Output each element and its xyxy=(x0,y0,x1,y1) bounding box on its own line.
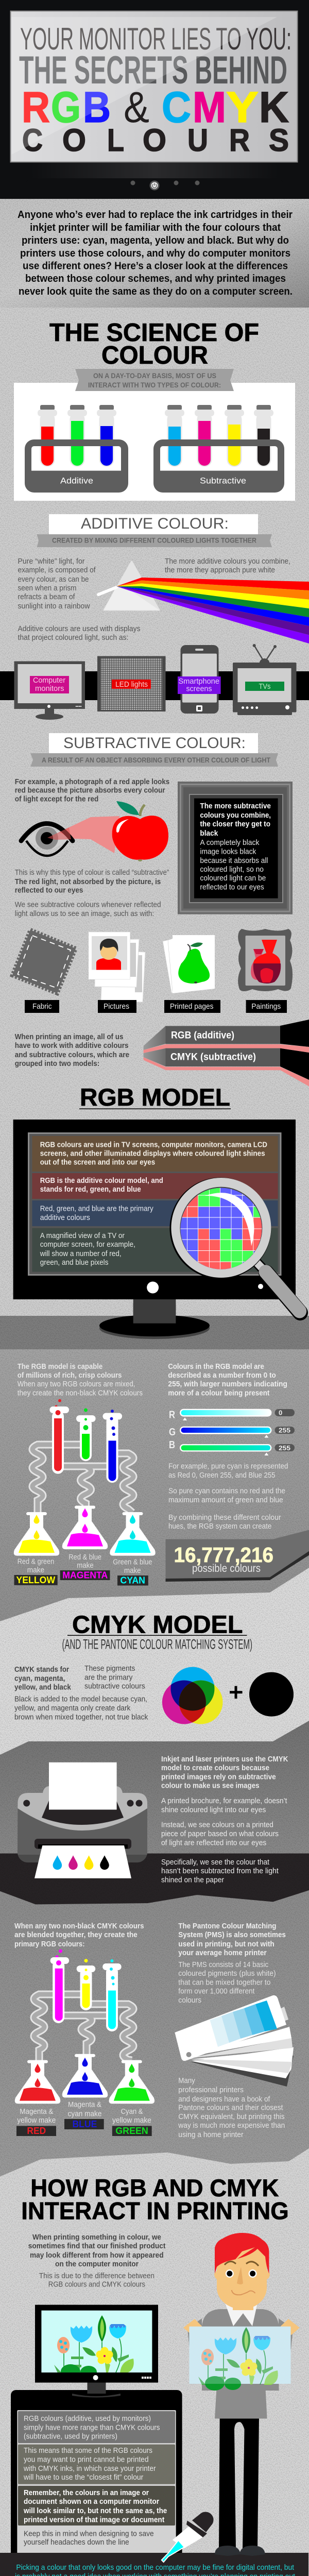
RGB sliders: 0 xyxy=(279,1409,282,1417)
text: Pantone: your average home printer xyxy=(178,1949,267,1957)
printed poster xyxy=(189,2327,290,2391)
flask labels: RED xyxy=(27,2126,46,2136)
intro text: Anyone who’s ever had to replace the ink cartridges in their xyxy=(18,209,293,221)
text: RGB capable: The RGB model is capable xyxy=(18,1363,102,1371)
text: printing in colour: When printing something in colour, we xyxy=(32,2233,161,2242)
text: pure cyan example: as Red 0, Green 255, and Blue 255 xyxy=(168,1471,275,1480)
magnifying glass xyxy=(170,1178,300,1313)
text: why subtractive: light allows us to see an image, such as with: xyxy=(15,910,154,918)
heading: how RGB and CMYK interact: HOW RGB AND CMYK xyxy=(30,2174,279,2201)
text: RGB capable: When any two RGB colours are mixed, xyxy=(18,1380,135,1388)
title: R xyxy=(22,83,50,131)
text: CMYK stands for: are the primary xyxy=(84,1674,133,1682)
title xyxy=(19,22,291,158)
text: RGB numbers: more of a colour being present xyxy=(168,1389,270,1398)
text: pure cyan example: maximum amount of green and blue xyxy=(168,1496,283,1504)
text: CMYK stands for xyxy=(14,1665,148,1722)
monitor text 4: computer screen, for example, xyxy=(40,1241,135,1249)
title: C xyxy=(22,123,43,158)
callout: 16,777,216 possible colours xyxy=(166,1530,309,1582)
text: Pantone: The PMS consists of 14 basic xyxy=(178,1961,268,1969)
tube: green xyxy=(76,1409,96,1461)
pencils: RGB and CMYK: CMYK (subtractive) xyxy=(170,1052,256,1062)
text: RGB capable: of millions of rich, crisp colours xyxy=(18,1371,122,1380)
labels: Paintings xyxy=(251,1003,281,1011)
text: pure cyan example: By combining these different colour xyxy=(168,1514,281,1522)
RGB sliders: 255 xyxy=(279,1426,290,1434)
band: picking a colour: Picking a colour that only looks good on the computer may be fine for digital content, but xyxy=(16,2564,294,2572)
text: pure white light: refracts a beam of xyxy=(18,593,75,601)
illustration: Pantone swatch book xyxy=(175,1995,294,2087)
tube: red xyxy=(49,1399,69,1474)
tablet panel: explanation: simply have more range than CMYK colours xyxy=(24,2424,160,2432)
text: Pantone: used in printing, but not with xyxy=(178,1940,274,1948)
tablet panel: explanation: will look similar to, but not the same as, the xyxy=(23,2507,167,2515)
tube: magenta xyxy=(50,1950,69,2023)
text: Pantone: form over 1,000 different xyxy=(178,1988,254,1996)
text: two models: and subtractive colours, which are xyxy=(15,1051,129,1059)
monitor text 2: RGB is the additive colour model, and xyxy=(40,1177,163,1185)
text: Pantone: System (PMS) is also sometimes xyxy=(178,1931,286,1939)
heading: additive colour: ADDITIVE COLOUR: xyxy=(81,515,229,532)
text: printers use CMYK: printed images rely on subtractive xyxy=(161,1773,276,1782)
text: printing in colour xyxy=(28,2233,166,2289)
text: professional printers: way is much more expensive than xyxy=(178,2122,285,2130)
prism and rainbow xyxy=(98,562,309,643)
intro text: inkjet printer will be familiar with the four colours that xyxy=(30,222,281,233)
picture frame with text: black xyxy=(200,829,218,838)
subtractive test tubes: Subtractive xyxy=(200,476,246,486)
title: S xyxy=(269,123,289,158)
text: red apple example xyxy=(15,778,169,804)
flask labels: make xyxy=(77,1562,94,1570)
heading: subtractive colour xyxy=(30,733,278,767)
text: CMYK stands for: These pigments xyxy=(84,1665,135,1673)
heading: how RGB and CMYK interact: INTERACT IN PRINTING xyxy=(21,2197,289,2225)
tablet panel: explanation: will have to use the “closest fit” colour xyxy=(23,2473,143,2482)
RGB sliders xyxy=(169,1409,295,1455)
monitor text 2 xyxy=(32,1173,278,1199)
title: O xyxy=(143,123,166,158)
title: M xyxy=(193,83,226,131)
CMY venn diagram plus black xyxy=(162,1667,294,1724)
picture frame with text xyxy=(178,782,293,914)
flask labels: GREEN xyxy=(115,2126,148,2136)
heading: additive colour: CREATED BY MIXING DIFFERENT COLOURED LIGHTS TOGETHER xyxy=(52,536,256,545)
text: Pantone: coloured pigments (plus white) xyxy=(178,1970,276,1978)
text: two models xyxy=(15,1033,129,1068)
text: displays: Additive colours are used with displays xyxy=(18,625,140,633)
text: CMYK stands for: Black is added to the model because cyan, xyxy=(14,1695,147,1703)
text: printers use CMYK: model to create colours because xyxy=(161,1764,269,1772)
text: professional printers: professional printers xyxy=(178,2086,244,2094)
icon: TV: TVs xyxy=(259,682,271,691)
text: Pantone: colours xyxy=(178,1996,201,2005)
text: red apple example: of light except for the red xyxy=(15,795,98,804)
text: printers use CMYK: shine coloured light into our eyes xyxy=(161,1806,266,1815)
CMY mixing apparatus xyxy=(15,1950,154,2136)
tablet panel: explanation: document shown on a computer monitor xyxy=(24,2498,159,2506)
ribbon: two types of colour: ON A DAY-TO-DAY BASIS, MOST OF US xyxy=(93,371,216,380)
text: pure cyan example: For example, pure cyan is represented xyxy=(168,1463,288,1471)
picture frame with text: image looks black xyxy=(200,848,256,856)
man holding printed poster xyxy=(183,2233,300,2549)
flask labels: make xyxy=(124,1567,141,1575)
picture frame with text: coloured light, so no xyxy=(200,866,264,874)
heading: additive colour xyxy=(37,514,272,547)
picture frame with text: the closer they get to xyxy=(200,820,270,828)
text: printers use CMYK: colour to make us see images xyxy=(161,1782,260,1790)
illustration: eye and apple xyxy=(21,801,168,861)
icon: computer monitor: Computer xyxy=(33,676,65,685)
text: RGB capable xyxy=(18,1363,143,1398)
text: professional printers xyxy=(178,2077,285,2139)
text: CMYK stands for: yellow, and black xyxy=(14,1684,72,1692)
intro text: between those colour schemes, and why printed images xyxy=(25,273,286,284)
text: pure white light: Pure “white” light, for xyxy=(18,557,85,566)
monitor text 1: RGB colours are used in TV screens, computer monitors, camera LCD xyxy=(40,1141,267,1149)
text: why subtractive: reflected to our eyes xyxy=(15,886,83,894)
title: U xyxy=(187,123,208,158)
icon: smartphone: Smartphone xyxy=(178,677,219,686)
monitor text 4: green, and blue pixels xyxy=(40,1259,108,1267)
tablet panel: explanation: Remember, the colours in an image or xyxy=(24,2489,149,2497)
flask labels: Red & green xyxy=(18,1558,54,1566)
text: pure cyan example: So pure cyan contains no red and the xyxy=(168,1487,285,1496)
heading: CMYK model: CMYK MODEL xyxy=(72,1612,243,1639)
text: CMYK stands for: yellow, and magenta only create dark xyxy=(14,1704,131,1713)
illustration: printer xyxy=(18,1762,147,1878)
labels: Fabric xyxy=(32,1003,52,1011)
text: non-black CMYK: are blended together, they create the xyxy=(14,1931,138,1939)
man's shoes xyxy=(215,2546,265,2556)
title: Y xyxy=(226,83,259,131)
title: R xyxy=(229,123,250,158)
tube: cyan xyxy=(102,1959,122,2031)
text: printers use CMYK: shined on the paper xyxy=(161,1876,224,1885)
subtractive test tubes xyxy=(153,405,284,493)
icon: smartphone xyxy=(178,645,221,714)
labels: Pictures xyxy=(104,1003,129,1011)
RGB sliders: R xyxy=(169,1410,175,1421)
icon: smartphone: screens xyxy=(186,684,212,693)
tube: yellow xyxy=(77,1959,95,2010)
intro text: printers use those colours, and why do computer monitors xyxy=(20,248,290,259)
text: RGB numbers: 255, with larger numbers indicating xyxy=(168,1380,287,1388)
text: more additive colours xyxy=(165,557,290,574)
flask labels: cyan make xyxy=(68,2110,101,2119)
ribbon: two types of colour: INTERACT WITH TWO TYPES OF COLOUR: xyxy=(88,381,221,389)
text: printing in colour: RGB colours and CMYK colours xyxy=(48,2281,145,2289)
band: picking a colour xyxy=(0,2553,308,2576)
RGB mixing apparatus xyxy=(14,1399,156,1586)
text: professional printers: CMYK equivalent, but printing this xyxy=(178,2113,285,2121)
text: RGB numbers: described as a number from 0 to xyxy=(168,1371,276,1380)
heading: the science of colour xyxy=(49,319,259,369)
flask labels: Red & blue xyxy=(68,1553,101,1562)
text: pure white light: sunlight into a rainbow xyxy=(18,602,90,611)
text: Pantone xyxy=(178,1922,286,2005)
text: CMYK stands for: subtractive colours xyxy=(84,1683,145,1691)
ribbon: two types of colour xyxy=(75,369,234,391)
picture frame with text: colours you combine, xyxy=(200,811,271,820)
icon: printed pages xyxy=(163,935,215,993)
text: why subtractive: We see subtractive colours whenever reflected xyxy=(15,901,161,909)
text: pure white light: seen when a prism xyxy=(18,584,76,592)
tablet panel: explanation: yourself headaches down the line xyxy=(24,2538,129,2547)
tablet panel: explanation: you may want to print cannot be printed xyxy=(24,2456,149,2464)
flask labels: yellow make xyxy=(112,2116,151,2125)
picture frame with text: A completely black xyxy=(200,839,260,847)
heading: subtractive colour: A RESULT OF AN OBJECT ABSORBING EVERY OTHER COLOUR OF LIGHT xyxy=(42,756,270,764)
panel: test tubes xyxy=(14,369,295,501)
monitor showing flowers xyxy=(35,2305,158,2398)
subtractive objects xyxy=(12,929,293,1013)
flask: red xyxy=(15,2060,60,2104)
text: professional printers: Pantone colours and their closest xyxy=(178,2104,283,2112)
panel: RGB monitor xyxy=(13,1120,296,1339)
pencils: RGB and CMYK: RGB (additive) xyxy=(171,1030,234,1041)
text: RGB numbers: Colours in the RGB model are xyxy=(168,1363,264,1371)
text: professional printers: and designers have a book of xyxy=(178,2095,270,2104)
text: printers use CMYK: Specifically, we see the colour that xyxy=(161,1858,269,1867)
title: K xyxy=(259,83,289,131)
text: pure white light: every colour, as can be xyxy=(18,575,89,584)
text: RGB numbers xyxy=(168,1363,287,1398)
text: non-black CMYK: primary RGB colours: xyxy=(14,1940,85,1948)
text: two models: grouped into two models: xyxy=(15,1060,99,1068)
tablet panel: explanation xyxy=(11,2390,182,2553)
text: printers use CMYK: Instead, we see colours on a printed xyxy=(161,1821,273,1829)
flask: magenta xyxy=(62,1505,108,1549)
text: two models: have to work with additive colours xyxy=(15,1042,129,1050)
text: red apple example: red because the picture absorbs every colour xyxy=(15,787,165,795)
callout: 16,777,216 possible colours: 16,777,216 xyxy=(174,1543,273,1567)
tablet panel: explanation: RGB colours (additive, used by monitors) xyxy=(24,2415,151,2423)
icon: LED lights: LED lights xyxy=(115,680,148,689)
title: L xyxy=(107,123,124,158)
picture frame with text: The more subtractive xyxy=(200,802,271,810)
text: professional printers: Many xyxy=(178,2077,195,2085)
flask labels xyxy=(16,2101,152,2136)
monitor text 4 xyxy=(32,1228,278,1272)
text: non-black CMYK: When any two non-black CMYK colours xyxy=(14,1922,144,1930)
intro text: printers use: cyan, magenta, yellow and black. But why do xyxy=(22,235,289,246)
flask: cyan xyxy=(110,1512,156,1556)
text: more additive colours: The more additive colours you combine, xyxy=(165,557,290,566)
icon: computer monitor: monitors xyxy=(35,684,64,693)
text: displays xyxy=(18,625,140,642)
icon: computer monitor xyxy=(14,662,85,720)
tablet panel: explanation: printed version of that image or document xyxy=(24,2516,164,2524)
text: printers use CMYK: hasn’t been subtracted from the light xyxy=(161,1867,279,1875)
icon: paintings xyxy=(238,929,293,991)
flask labels: BLUE xyxy=(72,2119,97,2129)
tube: blue xyxy=(103,1410,122,1483)
tablet panel: explanation: Keep this in mind when designing to save xyxy=(24,2530,154,2538)
heading: subtractive colour: SUBTRACTIVE COLOUR: xyxy=(63,735,246,752)
text: why subtractive: This is why this type of colour is called “subtractive” xyxy=(15,869,169,877)
title: O xyxy=(62,123,86,158)
additive displays xyxy=(0,644,309,720)
monitor text 1: out of the screen and into our eyes xyxy=(40,1159,155,1167)
labels: Printed pages xyxy=(170,1003,213,1011)
additive test tubes: Additive xyxy=(60,476,93,486)
flask: green xyxy=(109,2060,154,2104)
heading: the science of colour: THE SCIENCE OF xyxy=(49,319,259,347)
RGB sliders: G xyxy=(169,1427,176,1438)
text: pure cyan example xyxy=(168,1463,288,1531)
intro text: use different ones? Here’s a closer look at the differences xyxy=(23,261,288,272)
flask labels: Magenta & xyxy=(68,2101,101,2109)
icon: fabric xyxy=(12,930,76,993)
tablet panel: explanation: This means that some of the RGB colours xyxy=(24,2447,152,2455)
flask labels: CYAN xyxy=(120,1575,145,1586)
text: two models: When printing an image, all of us xyxy=(15,1033,124,1041)
text: printing in colour: on the computer monitor xyxy=(55,2260,139,2268)
text: printers use CMYK: piece of paper based on what colours xyxy=(161,1830,279,1838)
text: professional printers: using a home printer xyxy=(178,2131,244,2139)
heading: RGB model: RGB MODEL xyxy=(80,1083,230,1111)
heading: the science of colour: COLOUR xyxy=(101,342,208,369)
monitor text 3 xyxy=(32,1200,278,1226)
text: more additive colours: the more they approach pure white xyxy=(165,566,275,574)
flask labels: Cyan & xyxy=(121,2108,143,2116)
title: B xyxy=(83,83,111,131)
heading: CMYK model xyxy=(62,1612,252,1652)
flask labels: YELLOW xyxy=(16,1575,55,1585)
text: printers use CMYK: A printed brochure, for example, doesn’t xyxy=(161,1797,287,1805)
text: printers use CMYK: of light are reflected into our eyes xyxy=(161,1839,266,1847)
intro text: never look quite the same as they do on a computer screen. xyxy=(19,286,293,297)
intro text xyxy=(18,209,293,297)
text: printers use CMYK xyxy=(161,1755,288,1885)
text: printing in colour: sometimes find that our finished product xyxy=(28,2242,166,2250)
flask: blue xyxy=(62,2054,108,2097)
text: pure white light xyxy=(18,557,96,611)
text: printing in colour: may look different from how it appeared xyxy=(30,2251,164,2260)
flask: yellow xyxy=(14,1512,59,1556)
flask labels: Green & blue xyxy=(113,1558,152,1566)
text: printers use CMYK: Inkjet and laser printers use the CMYK xyxy=(161,1755,288,1764)
title: C xyxy=(162,83,191,131)
monitor text 3: additive colours xyxy=(40,1214,90,1222)
additive test tubes xyxy=(25,405,128,493)
text: non-black CMYK xyxy=(14,1922,144,1948)
picture frame with text: because it absorbs all xyxy=(200,857,268,865)
labels xyxy=(25,1000,287,1013)
flask labels xyxy=(14,1553,152,1586)
monitor text 1: screens, and other illuminated displays where coloured light shines xyxy=(40,1150,265,1158)
text: pure white light: example, is composed of xyxy=(18,566,96,574)
monitor text 3: Red, green, and blue are the primary xyxy=(40,1205,153,1213)
flask labels: Magenta & xyxy=(20,2108,54,2116)
icon: TV xyxy=(233,644,297,715)
text: displays: that project coloured light, such as: xyxy=(18,634,129,642)
callout: 16,777,216 possible colours: possible colours xyxy=(192,1563,261,1574)
text: CMYK stands for: cyan, magenta, xyxy=(14,1674,65,1683)
text: RGB capable: they create the non-black CMYK colours xyxy=(18,1389,143,1398)
monitor text 4: will show a number of red, xyxy=(40,1250,122,1258)
monitor text 4: A magnified view of a TV or xyxy=(40,1232,125,1240)
icon: pictures xyxy=(89,932,145,1002)
text: printing in colour: This is due to the difference between xyxy=(39,2272,154,2280)
picture frame with text: reflected to our eyes xyxy=(200,883,264,891)
monitor text 2: stands for red, green, and blue xyxy=(40,1185,141,1194)
flask labels: make xyxy=(27,1566,44,1574)
text: why subtractive xyxy=(15,869,169,918)
heading: how RGB and CMYK interact xyxy=(21,2174,289,2225)
RGB sliders: 255 xyxy=(279,1444,290,1452)
title: G xyxy=(51,83,81,131)
text: CMYK stands for: CMYK stands for xyxy=(14,1666,69,1674)
tablet panel: explanation: with CMYK inks, in which case your printer xyxy=(23,2465,156,2473)
text: pure cyan example: hues, the RGB system can create xyxy=(168,1522,271,1531)
monitor text 1 xyxy=(32,1136,278,1172)
flask labels: yellow make xyxy=(17,2116,56,2125)
text: Pantone: The Pantone Colour Matching xyxy=(178,1922,276,1930)
text: Pantone: that can be mixed together to xyxy=(178,1978,270,1987)
title: & xyxy=(124,83,149,131)
tablet panel: explanation: (subtractive, used by printers) xyxy=(24,2433,117,2441)
text: CMYK stands for: brown when mixed together, not true black xyxy=(14,1714,148,1722)
pencils: RGB and CMYK xyxy=(144,1020,309,1087)
text: red apple example: For example, a photograph of a red apple looks xyxy=(15,778,169,786)
icon: LED lights xyxy=(97,656,166,711)
text: why subtractive: The red light, not absorbed by the picture, is xyxy=(15,878,161,886)
flask labels: MAGENTA xyxy=(62,1570,108,1581)
picture frame with text: coloured light can be xyxy=(200,874,266,883)
icon: pipette dropper xyxy=(162,2512,214,2562)
RGB sliders: B xyxy=(169,1439,175,1451)
header monitor xyxy=(0,0,309,199)
